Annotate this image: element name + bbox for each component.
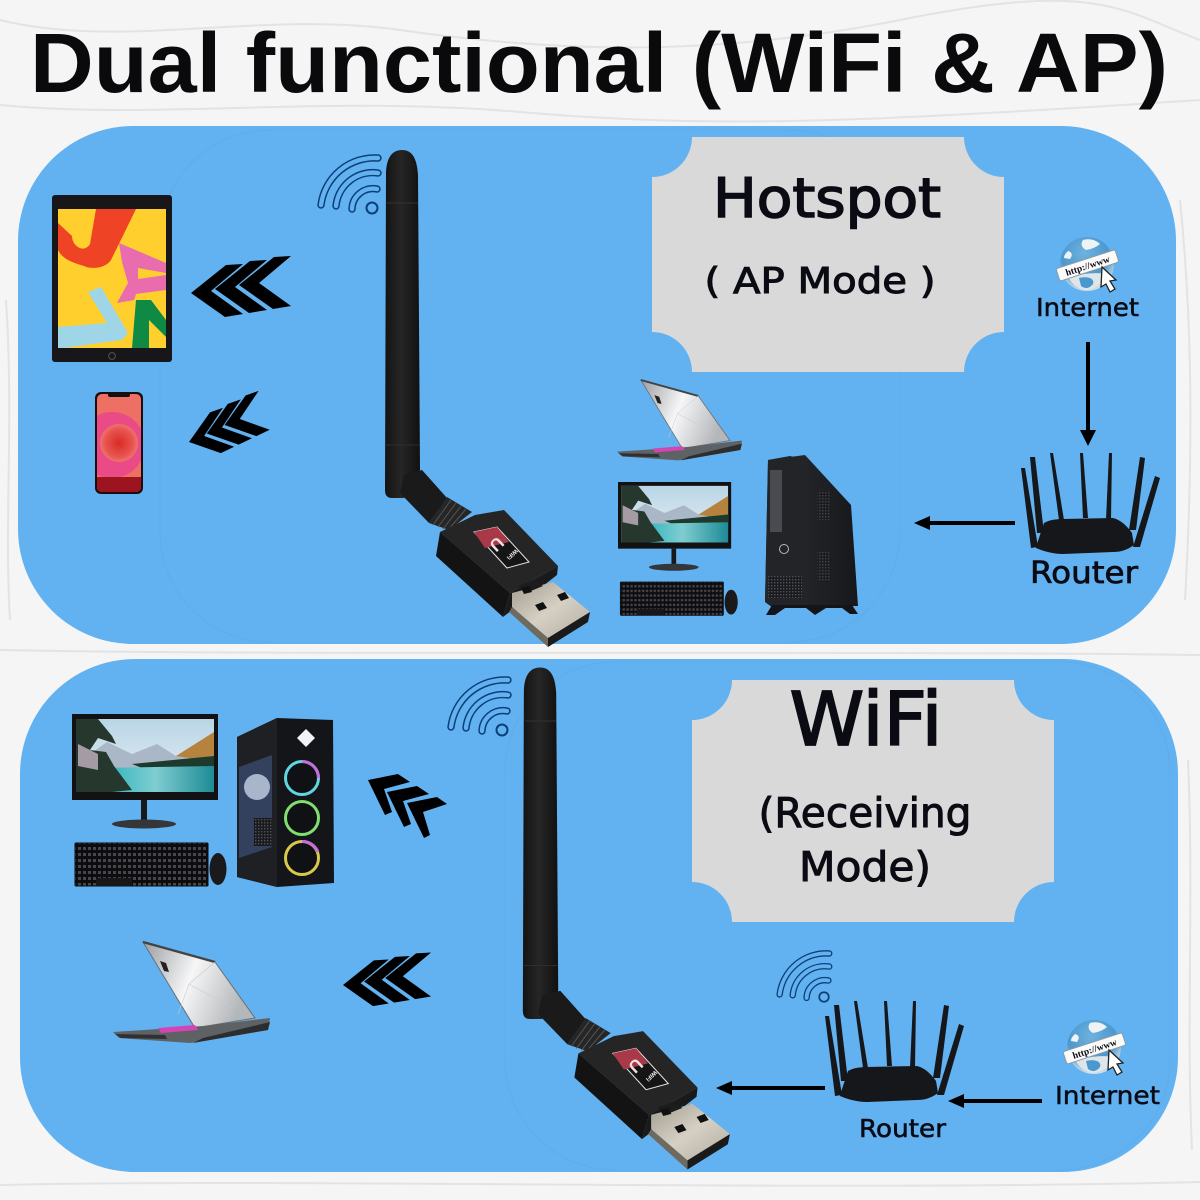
desktop tower <box>765 455 858 615</box>
callout: wifi receiving mode <box>692 677 1054 922</box>
arrows: tablet direction <box>191 256 291 317</box>
usb wifi dongle <box>385 150 590 647</box>
callout: hotspot AP mode: ( AP Mode ) <box>704 261 936 302</box>
arrow: router to computer <box>914 516 1015 530</box>
laptop <box>617 380 742 460</box>
callout: wifi receiving mode: (Receiving <box>758 789 972 837</box>
callout: wifi receiving mode: WiFi <box>790 677 942 763</box>
router: Router <box>859 1114 947 1143</box>
router: Router <box>1030 556 1139 591</box>
internet globe: Internet <box>1055 1081 1160 1110</box>
callout: hotspot AP mode: Hotspot <box>713 167 941 230</box>
internet globe <box>1055 1020 1160 1110</box>
router <box>825 1001 964 1143</box>
internet globe: Internet <box>1036 293 1139 322</box>
phone <box>95 392 143 494</box>
desktop monitor and keyboard <box>72 714 226 886</box>
antenna signal icon <box>321 158 378 214</box>
arrows: laptop direction <box>343 952 431 1006</box>
arrows: desktop direction <box>368 774 447 838</box>
title: Dual functional (WiFi & AP) <box>30 16 1168 110</box>
gaming tower <box>237 718 334 887</box>
callout: wifi receiving mode: Mode) <box>799 843 931 891</box>
router <box>1021 453 1160 591</box>
arrow: internet to router <box>1080 342 1096 446</box>
arrows: phone direction <box>181 391 272 461</box>
usb wifi dongle <box>523 668 730 1169</box>
arrow: internet to router <box>948 1094 1042 1108</box>
callout: hotspot AP mode <box>652 137 1004 372</box>
panel: hotspot AP mode <box>18 126 1176 647</box>
antenna signal icon <box>451 680 508 736</box>
laptop <box>113 942 270 1043</box>
router signal icon <box>780 953 829 1002</box>
internet globe <box>1036 237 1139 322</box>
panel: wifi receiving mode <box>20 659 1178 1172</box>
desktop monitor and keyboard <box>618 482 738 615</box>
tablet <box>52 195 172 362</box>
arrow: router to dongle <box>716 1081 825 1095</box>
